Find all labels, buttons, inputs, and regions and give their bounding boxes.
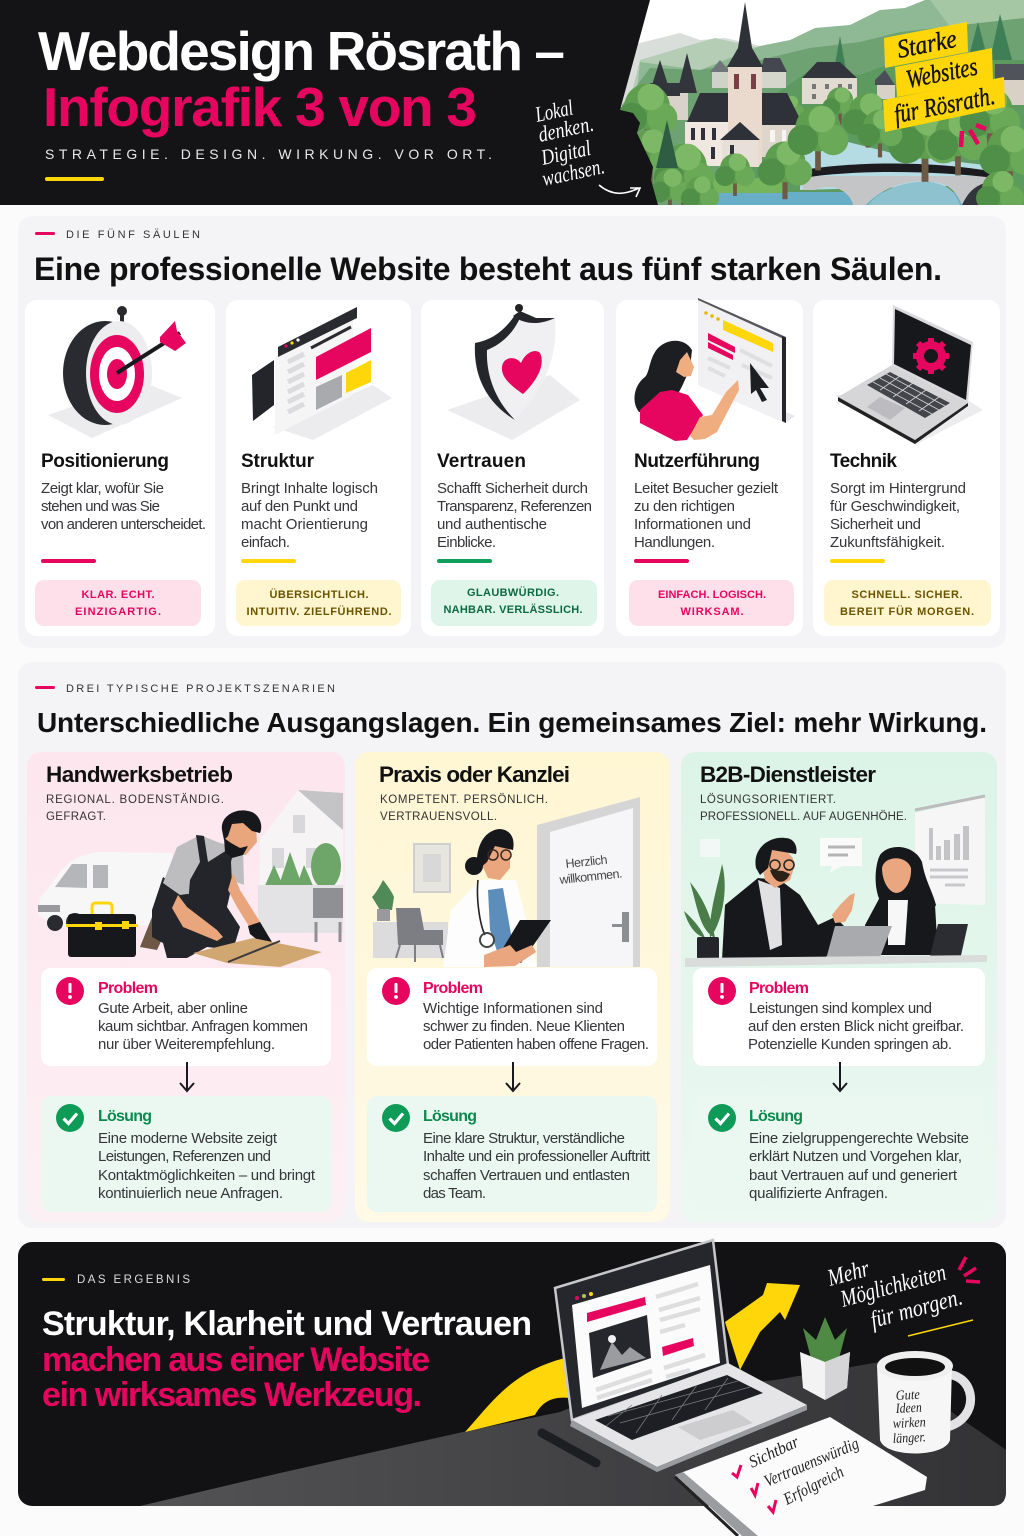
pink accent strokes: [961, 125, 986, 147]
solution box: Leistungen, Referenzen und: [98, 1148, 271, 1165]
problem box: [693, 968, 985, 1066]
tag: NAHBAR. VERLÄSSLICH.: [444, 603, 582, 616]
panel: result: [18, 1240, 1006, 1536]
tag: KLAR. ECHT.: [82, 589, 154, 601]
pillar: Positionierung: von anderen unterscheidet.: [41, 516, 206, 533]
tag: [824, 580, 991, 626]
trees foreground: [620, 84, 1024, 205]
pillar: Positionierung: Zeigt klar, wofür Sie: [41, 480, 164, 497]
problem box: Leistungen sind komplex und: [749, 1000, 932, 1017]
pillar: Struktur: Struktur: [241, 451, 315, 472]
scenario: Praxis oder Kanzlei: VERTRAUENSVOLL.: [380, 811, 497, 823]
scenario: Handwerksbetrieb: [27, 752, 345, 1222]
tag: [35, 580, 201, 626]
yellow slogan sign: für Rösrath.: [892, 81, 997, 129]
result heading: Struktur, Klarheit und Vertrauen: [42, 1305, 532, 1343]
tag: [431, 580, 597, 626]
yellow slogan sign: [883, 22, 1005, 132]
tag: BEREIT FÜR MORGEN.: [840, 605, 974, 618]
solution box: [41, 1096, 331, 1212]
pillar: Technik: Sicherheit und: [830, 516, 921, 533]
icon: layout: [252, 307, 392, 440]
scenario: Praxis oder Kanzlei: [355, 752, 670, 1222]
distant building: [710, 58, 787, 88]
handwritten note: Möglichkeiten: [837, 1260, 949, 1313]
eyebrow: DAS ERGEBNIS: [77, 1274, 190, 1286]
illustration: doctor: willkommen.: [558, 866, 623, 887]
village house far right: [875, 64, 1024, 105]
handwritten note: [824, 1256, 973, 1336]
tag: [629, 580, 794, 626]
illustration: doctor: [372, 797, 640, 967]
notebook: Erfolgreich: [779, 1462, 847, 1509]
problem box: [41, 968, 331, 1066]
subtitle: STRATEGIE. DESIGN. WIRKUNG. VOR ORT.: [45, 146, 492, 162]
icon: laptop gear: [835, 305, 983, 445]
problem box: Problem: [749, 980, 809, 997]
tag: GLAUBWÜRDIG.: [467, 586, 559, 599]
pillar: Nutzerführung: zu den richtigen: [634, 498, 735, 515]
pillar: Struktur: macht Orientierung: [241, 516, 368, 533]
tag: EINZIGARTIG.: [75, 606, 161, 618]
scenario: B2B-Dienstleister: B2B-Dienstleister: [700, 762, 876, 787]
main title: Infografik 3 von 3: [43, 76, 477, 138]
header banner: [0, 0, 1024, 222]
header landscape illustration: [610, 0, 1024, 222]
pillar: Nutzerführung: Informationen und: [634, 516, 751, 533]
toolbox: [66, 903, 138, 957]
solution box: Inhalte und ein professioneller Auftritt: [423, 1148, 651, 1165]
mug: wirken: [892, 1415, 926, 1432]
solution box: schaffen Vertrauen und entlasten: [423, 1167, 630, 1184]
handwritten note: Mehr: [824, 1256, 873, 1292]
result heading: [42, 1305, 532, 1414]
illustration: meeting: [684, 796, 987, 967]
eyebrow: DREI TYPISCHE PROJEKTSZENARIEN: [66, 683, 335, 695]
pillar: Positionierung: Positionierung: [41, 451, 169, 472]
solution box: Eine moderne Website zeigt: [98, 1130, 278, 1147]
scenario: Praxis oder Kanzlei: KOMPETENT. PERSÖNLICH.: [380, 794, 548, 806]
laptop: [555, 1240, 807, 1472]
pillar: Vertrauen: Vertrauen: [437, 451, 526, 472]
notebook: [675, 1417, 927, 1536]
panel: five pillars: [18, 216, 1006, 648]
problem box: Potenzielle Kunden springen ab.: [748, 1036, 952, 1053]
pillar: Vertrauen: [421, 300, 604, 636]
pillar: Struktur: einfach.: [241, 534, 290, 551]
pillar: Vertrauen: Transparenz, Referenzen: [437, 498, 592, 515]
village house right: [802, 62, 857, 104]
icon: shield: [447, 304, 580, 440]
tag: [236, 580, 401, 626]
pillar: Vertrauen: Einblicke.: [437, 534, 496, 551]
solution box: das Team.: [423, 1185, 486, 1202]
pillar: Nutzerführung: [616, 298, 803, 636]
tag: SCHNELL. SICHER.: [852, 589, 962, 601]
tag: EINFACH. LOGISCH.: [658, 589, 766, 601]
tag: INTUITIV. ZIELFÜHREND.: [246, 605, 392, 618]
eyebrow: DIE FÜNF SÄULEN: [66, 229, 200, 241]
solution box: kontinuierlich neue Anfragen.: [98, 1185, 283, 1202]
panel: three scenarios: [18, 662, 1006, 1228]
solution box: qualifizierte Anfragen.: [749, 1185, 888, 1202]
problem box: Problem: [98, 980, 158, 997]
scenario: B2B-Dienstleister: [681, 752, 997, 1222]
trees behind church: [788, 87, 884, 148]
problem box: auf den ersten Blick nicht greifbar.: [748, 1018, 964, 1035]
illustration: craftsman: [38, 790, 343, 967]
main title: Webdesign Rösrath –: [38, 20, 565, 82]
header black shape: [0, 0, 658, 205]
mug: [877, 1351, 971, 1454]
handwritten note: denken.: [536, 111, 596, 147]
arrow: [833, 1062, 847, 1091]
pink accent strokes: [959, 1257, 980, 1282]
icon: target: [48, 306, 186, 438]
pillar: Technik: Sorgt im Hintergrund: [830, 480, 966, 497]
problem box: Wichtige Informationen sind: [423, 1000, 603, 1017]
yellow underline: [45, 177, 104, 181]
handwritten note: für morgen.: [868, 1284, 965, 1334]
pillar: Nutzerführung: Handlungen.: [634, 534, 715, 551]
pillar: Struktur: Bringt Inhalte logisch: [241, 480, 378, 497]
pillar: Technik: Zukunftsfähigkeit.: [830, 534, 945, 551]
solution box: Kontaktmöglichkeiten – und bringt: [98, 1167, 316, 1184]
icon: user at screen: [634, 298, 795, 441]
scenario: B2B-Dienstleister: PROFESSIONELL. AUF AUGENHÖHE.: [700, 811, 907, 823]
pillar: Technik: für Geschwindigkeit,: [830, 498, 960, 515]
mug: länger.: [892, 1430, 926, 1447]
handwritten note: Digital: [538, 135, 593, 170]
tag: ÜBERSICHTLICH.: [270, 588, 368, 601]
pillar: Positionierung: stehen und was Sie: [41, 498, 160, 515]
pillar: Nutzerführung: Nutzerführung: [634, 451, 760, 472]
problem box: kaum sichtbar. Anfragen kommen: [98, 1018, 308, 1035]
pillar: Vertrauen: und authentische: [437, 516, 547, 533]
man: [140, 810, 272, 958]
arrow: [506, 1062, 520, 1091]
scenarios heading: Unterschiedliche Ausgangslagen. Ein gemeinsames Ziel: mehr Wirkung.: [37, 707, 987, 738]
solution box: erklärt Nutzen und Vorgehen klar,: [749, 1148, 962, 1165]
pillar: Struktur: [226, 300, 411, 636]
handwritten note: wachsen.: [540, 153, 607, 191]
yellow slogan sign: Websites: [904, 52, 980, 94]
solution box: [693, 1096, 985, 1212]
scenario: Handwerksbetrieb: REGIONAL. BODENSTÄNDIG.: [46, 794, 224, 806]
result heading: machen aus einer Website: [42, 1341, 430, 1379]
pillar: Struktur: auf den Punkt und: [241, 498, 358, 515]
mug: Ideen: [895, 1401, 922, 1417]
pillar: Vertrauen: Schafft Sicherheit durch: [437, 480, 588, 497]
handwritten note: [532, 95, 607, 191]
pillar: Technik: [813, 300, 1000, 636]
pillar: Nutzerführung: Leitet Besucher gezielt: [634, 480, 779, 497]
illustration: doctor: Herzlich: [565, 853, 608, 871]
solution box: Lösung: [749, 1108, 803, 1125]
desk surface: [140, 1362, 1006, 1506]
church: [650, 2, 803, 167]
scenario: Handwerksbetrieb: GEFRAGT.: [46, 811, 106, 823]
problem box: schwer zu finden. Neue Klienten: [423, 1018, 625, 1035]
problem box: [367, 968, 657, 1066]
mug: Gute: [895, 1388, 920, 1404]
notebook: Sichtbar: [746, 1432, 802, 1472]
plant pot: [800, 1317, 850, 1400]
solution box: Eine klare Struktur, verständliche: [423, 1130, 625, 1147]
main title: [38, 20, 565, 138]
problem box: oder Patienten haben offene Fragen.: [423, 1036, 649, 1053]
wood boards: [193, 938, 322, 967]
solution box: baut Vertrauen auf und generiert: [749, 1167, 958, 1184]
solution box: [367, 1096, 657, 1212]
handwritten note: Lokal: [532, 95, 575, 127]
solution box: Lösung: [423, 1108, 477, 1125]
tag: WIRKSAM.: [680, 606, 744, 618]
curved arrow: [599, 185, 640, 197]
arrow: [180, 1062, 194, 1091]
result heading: ein wirksames Werkzeug.: [42, 1376, 422, 1414]
solution box: Eine zielgruppengerechte Website: [749, 1130, 969, 1147]
problem box: nur über Weiterempfehlung.: [98, 1036, 275, 1053]
solution box: Lösung: [98, 1108, 152, 1125]
scenario: Handwerksbetrieb: Handwerksbetrieb: [46, 762, 233, 787]
notebook: Vertrauenswürdig: [761, 1434, 862, 1491]
bridge: [803, 164, 995, 205]
yellow slogan sign: Starke: [895, 24, 959, 64]
river: [800, 142, 984, 190]
pen: [542, 1433, 596, 1463]
problem box: Problem: [423, 980, 483, 997]
scenario: B2B-Dienstleister: LÖSUNGSORIENTIERT.: [700, 794, 836, 806]
pillar: Technik: Technik: [830, 451, 897, 472]
yellow growth arrow: [465, 1283, 800, 1432]
pillars heading: Eine professionelle Website besteht aus fünf starken Säulen.: [34, 251, 942, 287]
problem box: Gute Arbeit, aber online: [98, 1000, 248, 1017]
pillar: Positionierung: [25, 300, 215, 636]
scenario: Praxis oder Kanzlei: Praxis oder Kanzlei: [379, 762, 570, 787]
